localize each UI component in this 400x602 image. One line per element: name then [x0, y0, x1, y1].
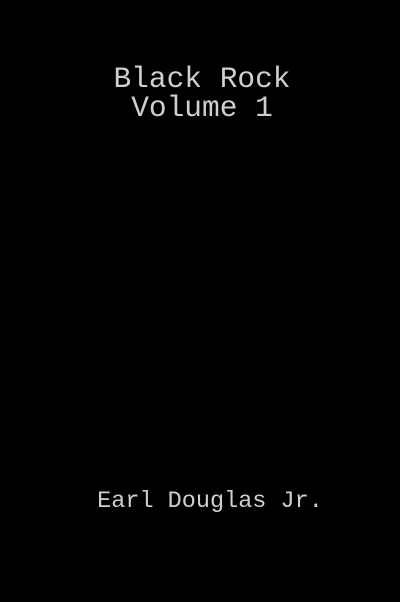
author name: Earl Douglas Jr.	[97, 488, 323, 515]
title	[113, 62, 291, 125]
title: Volume 1	[131, 91, 273, 125]
title: Black Rock	[113, 62, 291, 96]
